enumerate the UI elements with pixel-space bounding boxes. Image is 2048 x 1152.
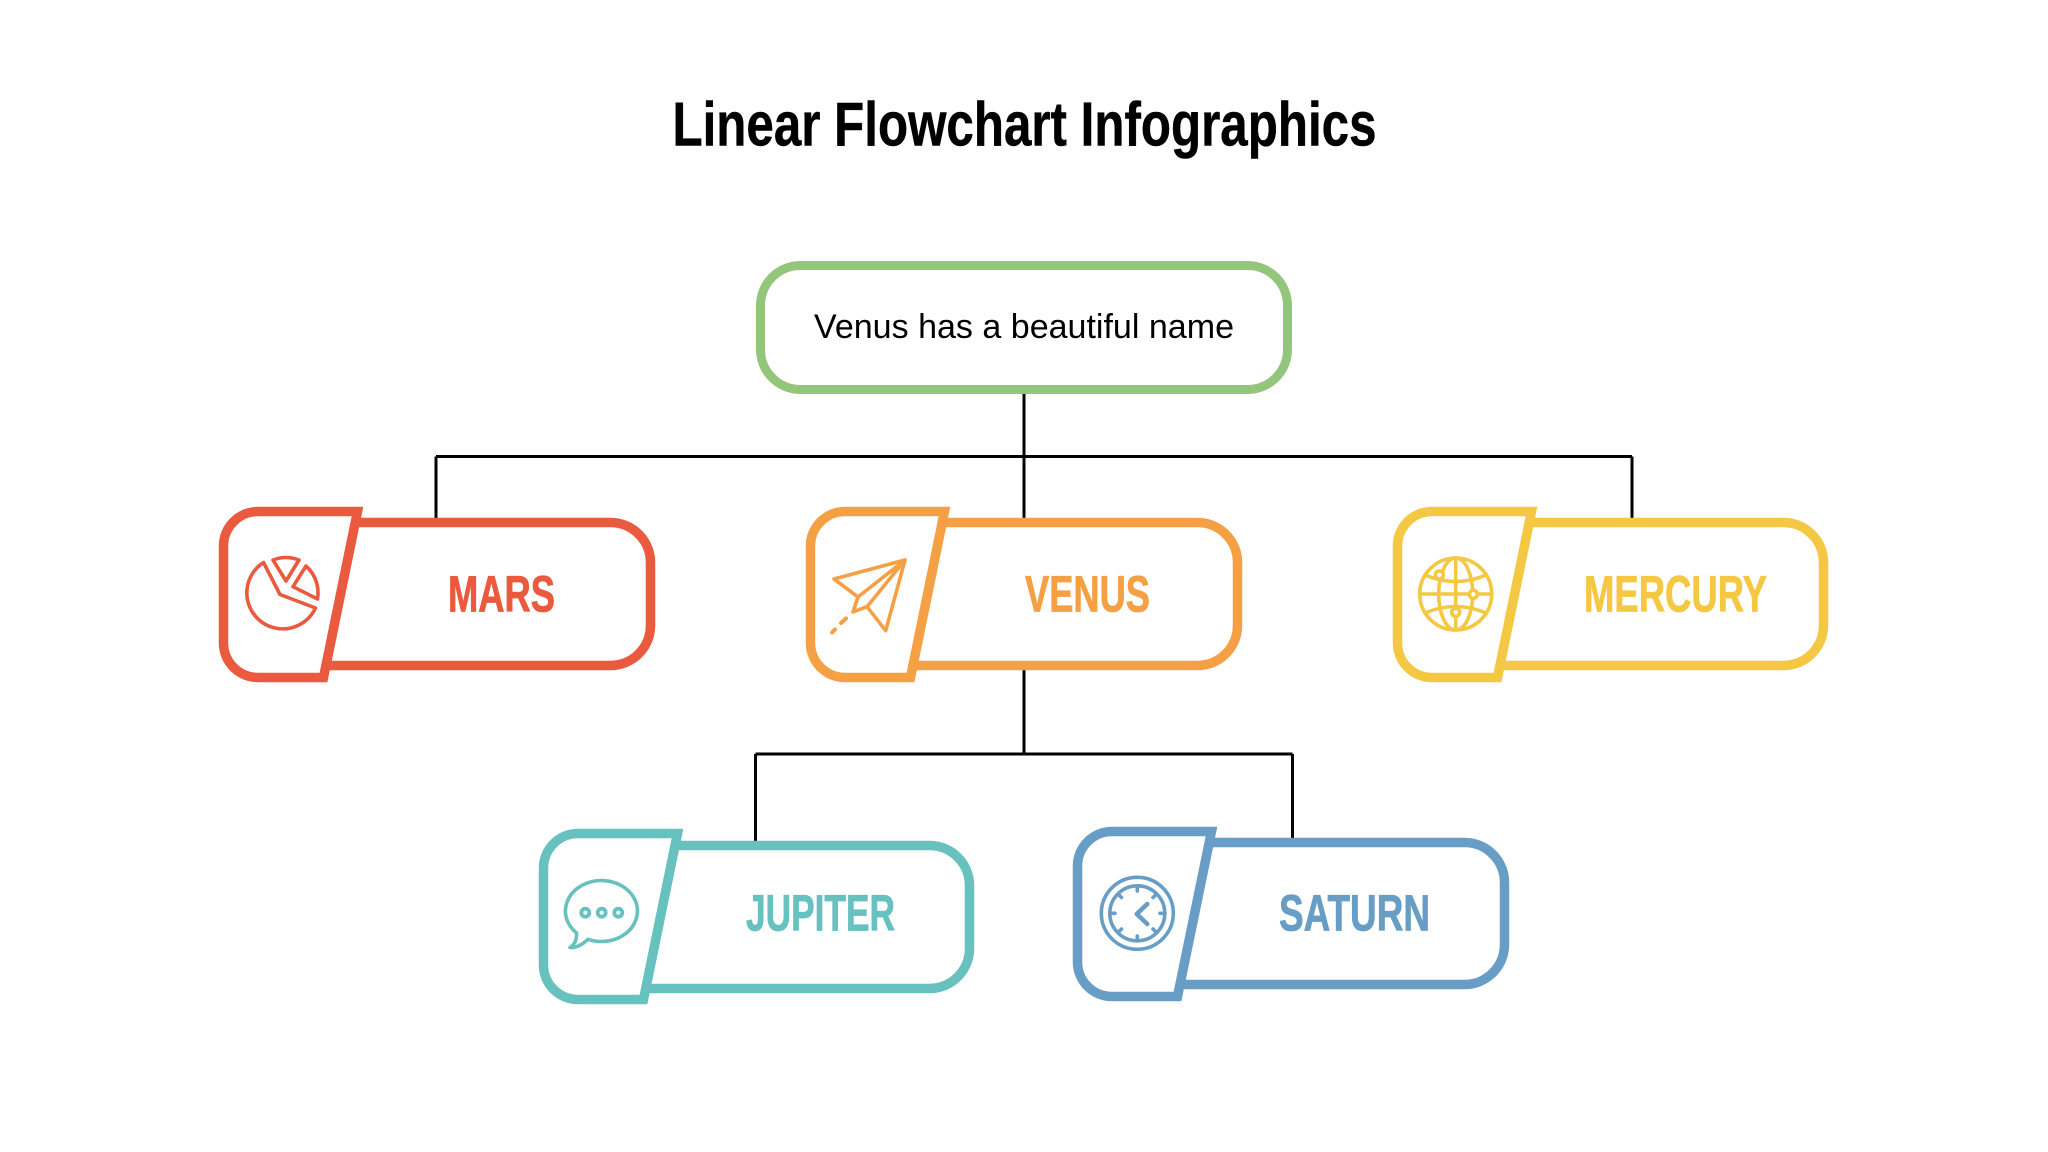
icon: paper plane: [832, 560, 905, 632]
label: Mars: MARS: [448, 566, 555, 622]
node: Mars: [224, 512, 651, 678]
node: Jupiter: [544, 834, 970, 1000]
label: Venus: VENUS: [1025, 566, 1150, 622]
label: Jupiter: JUPITER: [746, 884, 895, 942]
title: Linear Flowchart Infographics: [672, 90, 1376, 160]
icon: speech bubble: [565, 881, 637, 948]
label: Mercury: MERCURY: [1584, 566, 1767, 622]
connector lines: Venus to second row: [756, 670, 1292, 841]
root box text: Venus has a beautiful name: [814, 308, 1234, 346]
node: Venus: [810, 512, 1238, 678]
node: Mercury: [1398, 512, 1824, 678]
icon: pie chart: [247, 558, 318, 629]
root box: [760, 266, 1288, 390]
icon: globe: [1420, 558, 1492, 630]
connector lines: root to first row: [436, 394, 1632, 518]
icon: clock: [1101, 877, 1173, 949]
label: Saturn: SATURN: [1279, 884, 1430, 942]
node: Saturn: [1078, 832, 1505, 996]
